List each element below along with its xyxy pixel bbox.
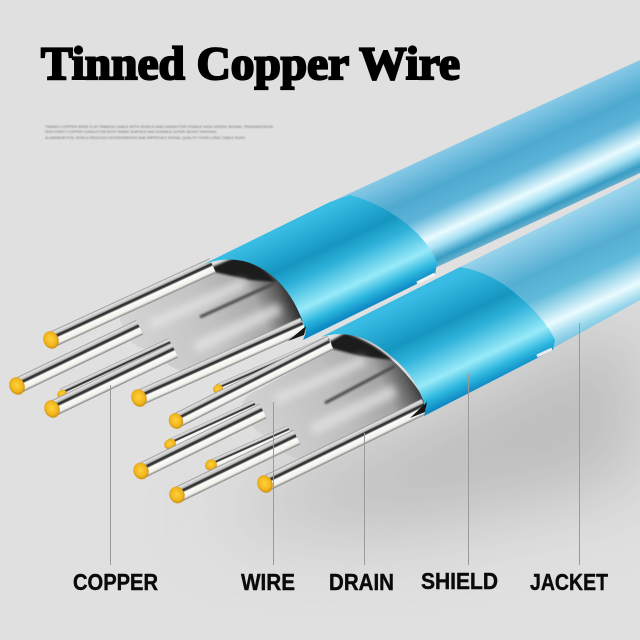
wire 2 (6, 319, 144, 397)
wire 1 (40, 257, 216, 351)
back cable insulation (120, 256, 305, 372)
back cable jacket (335, 60, 640, 270)
front cable (131, 178, 640, 506)
back cable shield (204, 195, 437, 341)
back cable (6, 60, 640, 420)
hidden front wire a (211, 336, 332, 396)
label drain: DRAIN (329, 569, 394, 595)
label jacket: JACKET (530, 569, 608, 595)
leader lines (110, 323, 580, 565)
wire 3 (41, 342, 179, 420)
wire 5 (166, 336, 334, 431)
small caption text: ALUMINIUM FOIL SHIELD REDUCES INTERFERENCE AND IMPROVES SIGNAL QUALITY OVER LONG CABLE RUNS (45, 136, 246, 140)
title: Tinned Copper Wire (41, 38, 460, 90)
small caption text: HIGH PURITY COPPER CONDUCTOR WITH TINNED SURFACE AND DURABLE OUTER JACKET MATERIAL (45, 130, 217, 134)
small caption text (45, 125, 273, 140)
front cable insulation (242, 333, 426, 458)
hidden back wire (55, 338, 173, 401)
hidden front wire c (203, 425, 292, 472)
back cable wires (6, 257, 307, 420)
front cable shield (321, 267, 555, 418)
label shield: SHIELD (421, 568, 498, 594)
front cable jacket (460, 178, 640, 350)
wire 4 (128, 317, 307, 409)
hidden front wire b (162, 400, 258, 451)
wire 7 (167, 429, 300, 506)
wire 8 (254, 398, 429, 495)
front cable wires (131, 336, 429, 506)
small caption text: TINNED COPPER WIRE FLAT RIBBON CABLE WITH SHIELD AND DRAIN FOR STABLE HIGH SPEED SIGNAL TRANSMISSION (45, 125, 273, 129)
wire 6 (131, 403, 267, 482)
label copper: COPPER (73, 569, 158, 595)
component labels (73, 568, 608, 595)
label wire: WIRE (241, 569, 295, 595)
